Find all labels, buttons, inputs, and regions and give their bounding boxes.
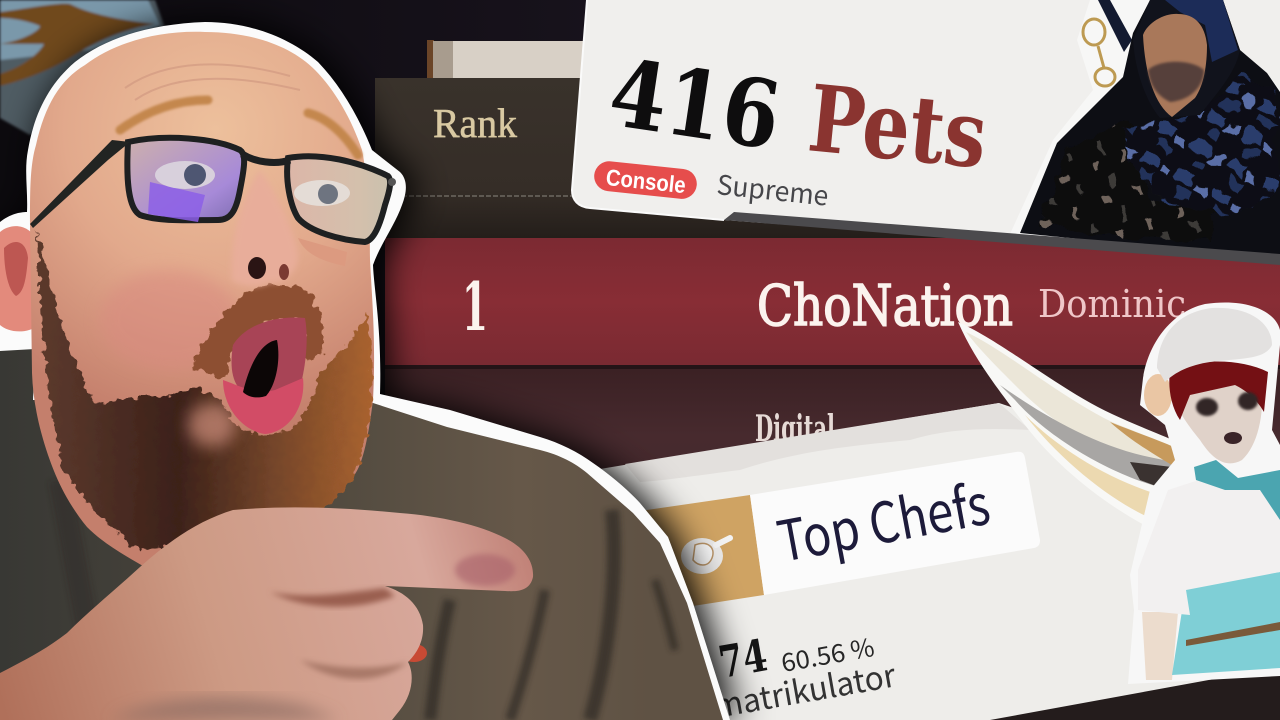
wing [958,322,1205,528]
forehead wrinkles [125,64,300,100]
console text: Console [605,164,687,198]
red leaderboard row [385,238,1280,365]
icon: roast chicken [681,538,730,574]
palm and arm [0,507,533,720]
red fingertip [401,644,427,662]
ear [1144,374,1172,416]
eyes [1196,392,1258,416]
beard [38,232,372,550]
nostrils [248,257,289,280]
mouth [223,317,307,434]
dark lower strip [725,667,1280,720]
skirt [1172,572,1280,675]
temple arm [30,140,130,228]
strip under card [724,212,1280,265]
hat [1157,308,1272,382]
mouth [1224,432,1242,444]
shirt folds [60,480,675,720]
jacket [1138,478,1280,615]
shirt [0,349,723,720]
fingertip shade [455,554,515,586]
body armor [1020,0,1280,258]
belt [1186,622,1280,646]
hood [1133,0,1240,118]
white sticker outline [1010,0,1280,258]
face [1172,385,1262,463]
console badge [593,160,698,200]
beard [1148,62,1204,102]
cheek blush [100,270,240,370]
sticker outline [1128,302,1280,684]
ear [0,226,40,331]
left lens [127,138,244,220]
hair [1169,362,1268,420]
card: 416 Pets [572,0,1280,262]
server name: Supreme [715,163,831,214]
finger shadow [270,588,395,607]
armored character [724,0,1280,265]
chef character [958,302,1280,684]
scarf [1194,460,1280,520]
person pointing [0,22,730,720]
card: Top Chefs [600,403,1280,720]
clipped row label: Digital [755,408,835,450]
hood blue trim [1165,0,1238,62]
nose [232,170,298,286]
pink chin patch [188,403,236,447]
glasses [30,138,396,242]
white sticker outline [0,22,730,720]
eyebrows [120,100,358,155]
purple screen reflection [148,182,205,222]
top-left game map fragment [0,0,165,135]
hand lower shade [110,698,340,720]
mustache [192,285,323,378]
right lens [287,156,390,242]
arm [1142,612,1178,680]
blue armor scales [1120,72,1278,215]
lower finger shadow [300,660,408,679]
leaderboard rank header [375,78,1280,238]
cheek flap [298,238,347,266]
Pets label: Pets [804,64,992,190]
right hinge [388,178,396,186]
bridge [242,154,290,162]
left eye [155,161,215,189]
torn paper band [625,403,1030,482]
Top Chefs heading: Top Chefs [770,460,996,579]
big number: 416 [603,38,787,171]
head [30,32,374,566]
person drop shadow [8,22,738,720]
title label [750,452,1040,595]
lower dark scales [1042,118,1215,242]
rank number: 1 [462,268,488,346]
sword strap [1098,0,1132,52]
player server: Dominic [1038,282,1186,326]
gold chain [1083,19,1115,86]
gold icon tile [640,495,764,608]
next dark leaderboard row [385,365,1280,720]
rank label: Rank [433,100,517,146]
player name: ChoNation [757,274,1013,339]
stat value: 74 [715,630,771,689]
pointing hand [0,507,533,720]
right eye [294,180,350,206]
stat percentage: 60.56 % [778,628,877,680]
face [1143,14,1207,117]
book on shelf [427,40,588,80]
